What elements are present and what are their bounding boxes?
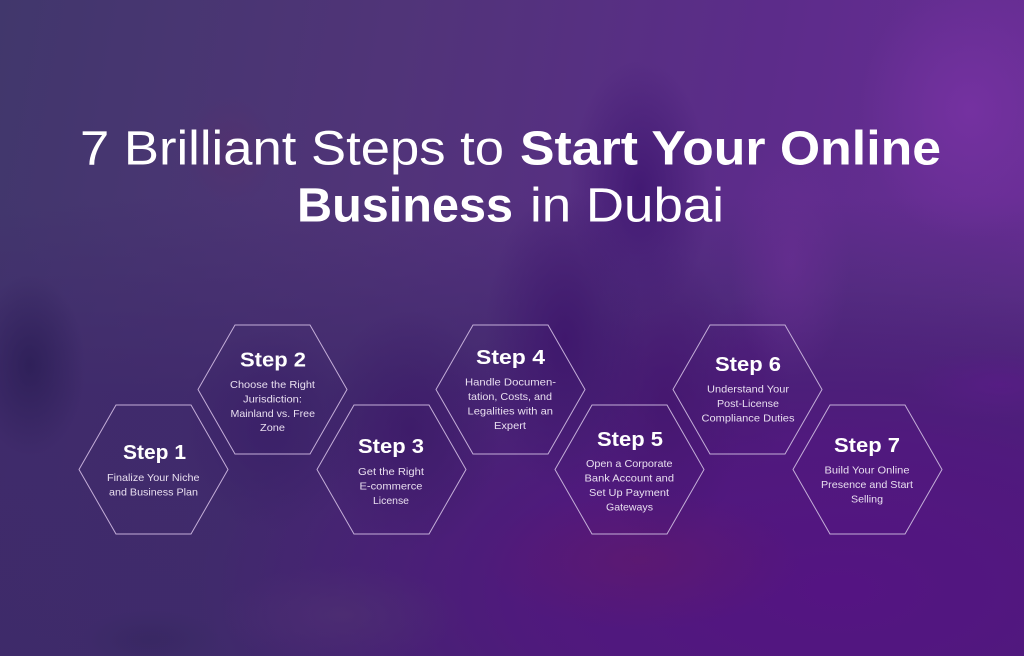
step 4 description: Legalities with an [468,406,553,418]
step 1 hexagon [79,405,228,534]
step 2 description: Zone [260,422,285,434]
step 2 description: Mainland vs. Free [230,408,315,420]
step 3 description [358,466,424,507]
step 2 description: Choose the Right [230,379,315,391]
step 2 heading: Step 2 [240,350,306,372]
title: 7 Brilliant Steps to [80,122,504,176]
step 4 hexagon [436,325,585,454]
step 7 description: Build Your Online [824,465,910,477]
step 4 description: tation, Costs, and [468,391,552,403]
title: Start Your Online [520,122,941,176]
step 1 heading: Step 1 [123,442,186,464]
step 5 description: Set Up Payment [589,487,669,499]
step 3 description: Get the Right [358,466,424,478]
step 7 description [821,465,913,506]
title: in Dubai [530,180,724,232]
step 6 hexagon [673,325,822,454]
step 5 hexagon [555,405,704,534]
step 4 description: Expert [494,420,526,432]
step 1 description [107,472,200,498]
step 5 description: Bank Account and [584,472,674,484]
step 3 description: License [373,495,409,507]
step 6 description: Compliance Duties [702,412,794,424]
step 7 description: Presence and Start [821,479,913,491]
step 6 description: Understand Your [707,384,790,396]
step 7 description: Selling [851,494,883,506]
step 5 description: Gateways [606,502,653,514]
step 5 description: Open a Corporate [586,458,673,470]
title [80,122,941,232]
step 7 hexagon [793,405,942,534]
step 3 description: E-commerce [360,480,423,492]
step 6 description: Post-License [717,398,779,410]
step 1 description: Finalize Your Niche [107,472,200,484]
step 6 heading: Step 6 [715,354,781,376]
step 2 description [230,379,315,434]
step 3 hexagon [317,405,466,534]
step 6 description [702,384,794,424]
step 5 description [584,458,674,514]
step 2 hexagon [198,325,347,454]
step 1 description: and Business Plan [109,486,198,498]
title: Business [297,180,513,232]
step 4 description [465,377,557,432]
step 5 heading: Step 5 [597,429,663,451]
step 7 heading: Step 7 [834,435,900,457]
step 4 heading: Step 4 [476,347,546,369]
step 2 description: Jurisdiction: [243,394,302,406]
step 4 description: Handle Documen- [465,377,557,389]
step 3 heading: Step 3 [358,436,424,458]
